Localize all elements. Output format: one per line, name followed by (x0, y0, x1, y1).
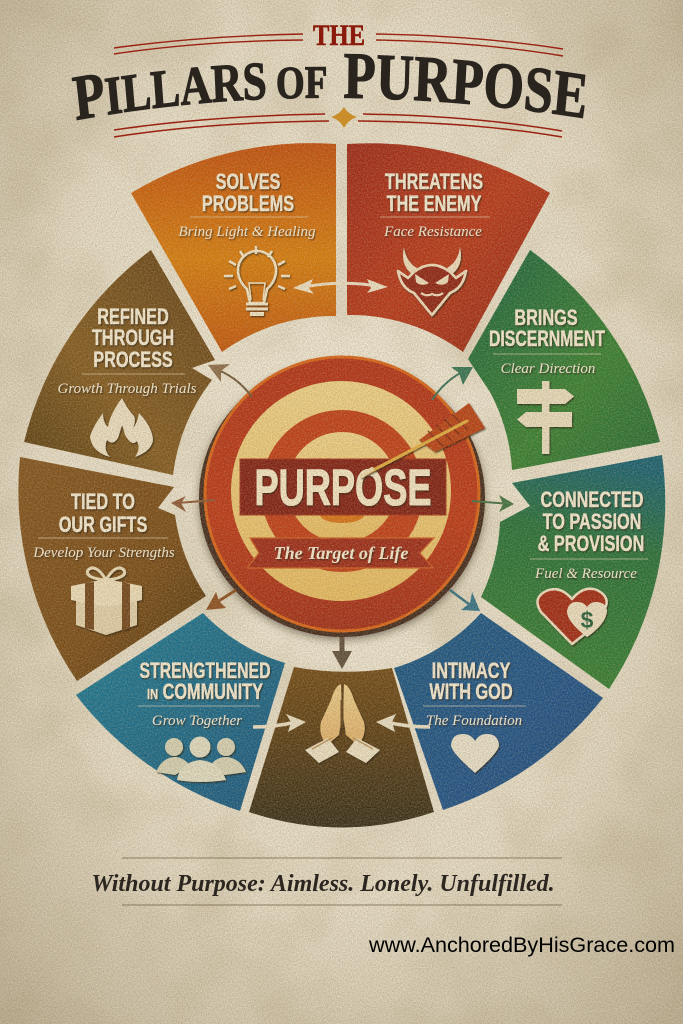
subtitle: Fuel & Resource (534, 566, 637, 582)
target: purpose bullseye (199, 357, 485, 637)
arrow: community to prayer (253, 714, 306, 732)
heading: connected to passion and provision: & PROVISION (538, 532, 644, 557)
panel: tied to our gifts (18, 457, 206, 681)
subtitle: Growth Through Trials (58, 381, 197, 397)
footer tagline (91, 858, 562, 905)
heading: threatens the enemy: THE ENEMY (387, 192, 482, 217)
website url: www.AnchoredByHisGrace.com (368, 932, 675, 957)
arrow: intimacy to prayer (376, 714, 430, 732)
icon: praying hands (305, 684, 380, 763)
subtitle: The Foundation (426, 713, 522, 729)
title word: THE: THE (313, 19, 365, 52)
heading: threatens the enemy (385, 170, 483, 217)
panel: refined through process (24, 250, 215, 475)
arrows to segments (171, 279, 514, 732)
heading: intimacy with god (429, 659, 513, 705)
title main: Pillars of Purpose: PILLARS OF PURPOSE (72, 54, 586, 120)
subtitle: Grow Together (152, 713, 242, 729)
arrow: target to passion (472, 495, 514, 512)
subtitle: Bring Light & Healing (178, 224, 316, 240)
footer tagline: Without Purpose: Aimless. Lonely. Unfulfilled. (91, 871, 555, 897)
panel: brings discernment (468, 250, 660, 470)
heading: intimacy with god: INTIMACY (432, 659, 510, 684)
heading: connected to passion and provision: CONNECTED (540, 488, 644, 513)
heading: connected to passion and provision (538, 488, 644, 557)
ribbon: the target of life: The Target of Life (274, 543, 408, 563)
arrow: target to discernment (432, 367, 473, 400)
heading: refined through process: THROUGH (92, 326, 174, 351)
panel: strengthened in community (76, 613, 285, 811)
heading: strengthened in community: STRENGTHENED (139, 660, 271, 684)
heading: tied to our gifts: OUR GIFTS (59, 513, 147, 538)
ribbon: the target of life (247, 538, 434, 568)
banner: purpose: PURPOSE (254, 460, 432, 517)
panel: threatens the enemy (347, 143, 550, 352)
target rings (199, 357, 485, 637)
subtitle: Face Resistance (383, 224, 482, 240)
heading: brings discernment: DISCERNMENT (489, 328, 605, 352)
icon: hearts with dollar: $ (581, 607, 594, 633)
subtitle: Develop Your Strengths (32, 545, 175, 561)
heading: strengthened in community (139, 660, 271, 705)
icon: light bulb (224, 246, 290, 314)
arrow: target to intimacy (450, 590, 480, 611)
heading: solves problems: SOLVES (216, 170, 280, 195)
icon: gold diamond (331, 107, 357, 128)
heading: refined through process: PROCESS (93, 348, 173, 373)
panel: intimacy with god (394, 613, 603, 810)
heading: refined through process: REFINED (97, 305, 169, 330)
heading: tied to our gifts (59, 490, 147, 538)
heading: tied to our gifts: TIED TO (71, 490, 135, 515)
heading: strengthened in community: IN COMMUNITY (147, 680, 263, 705)
subtitle: Clear Direction (501, 361, 595, 377)
icon: heart (451, 734, 499, 773)
icon: signpost (517, 381, 574, 454)
heading: solves problems: PROBLEMS (202, 192, 294, 217)
panel: solves problems (131, 143, 336, 352)
panel: connected to passion and provision (481, 455, 665, 689)
arrow: between bulb and devil (293, 279, 388, 294)
heading: connected to passion and provision: TO PASSION (543, 510, 641, 535)
title rules: upper (114, 34, 563, 56)
heading: solves problems (202, 170, 294, 217)
heading: threatens the enemy: THREATENS (385, 170, 483, 195)
panel: prayer foundation (249, 667, 434, 828)
arrow: target to prayer (332, 637, 352, 669)
arrow: target to gifts (171, 496, 215, 512)
icon: people (156, 736, 246, 782)
heading: refined through process (92, 305, 174, 373)
title (72, 19, 586, 138)
icon: devil (398, 247, 466, 315)
icon: gift box (71, 568, 142, 635)
arrow: target to community-side gifts (206, 590, 236, 610)
heading: brings discernment: BRINGS (514, 306, 578, 331)
icon: hearts with dollar (537, 589, 607, 644)
heading: brings discernment (489, 306, 605, 352)
title rules: lower (114, 114, 562, 137)
arrow in target (362, 403, 485, 476)
arrow: target to refined (208, 364, 252, 397)
heading: intimacy with god: WITH GOD (429, 680, 513, 705)
icon: flame (90, 398, 153, 457)
